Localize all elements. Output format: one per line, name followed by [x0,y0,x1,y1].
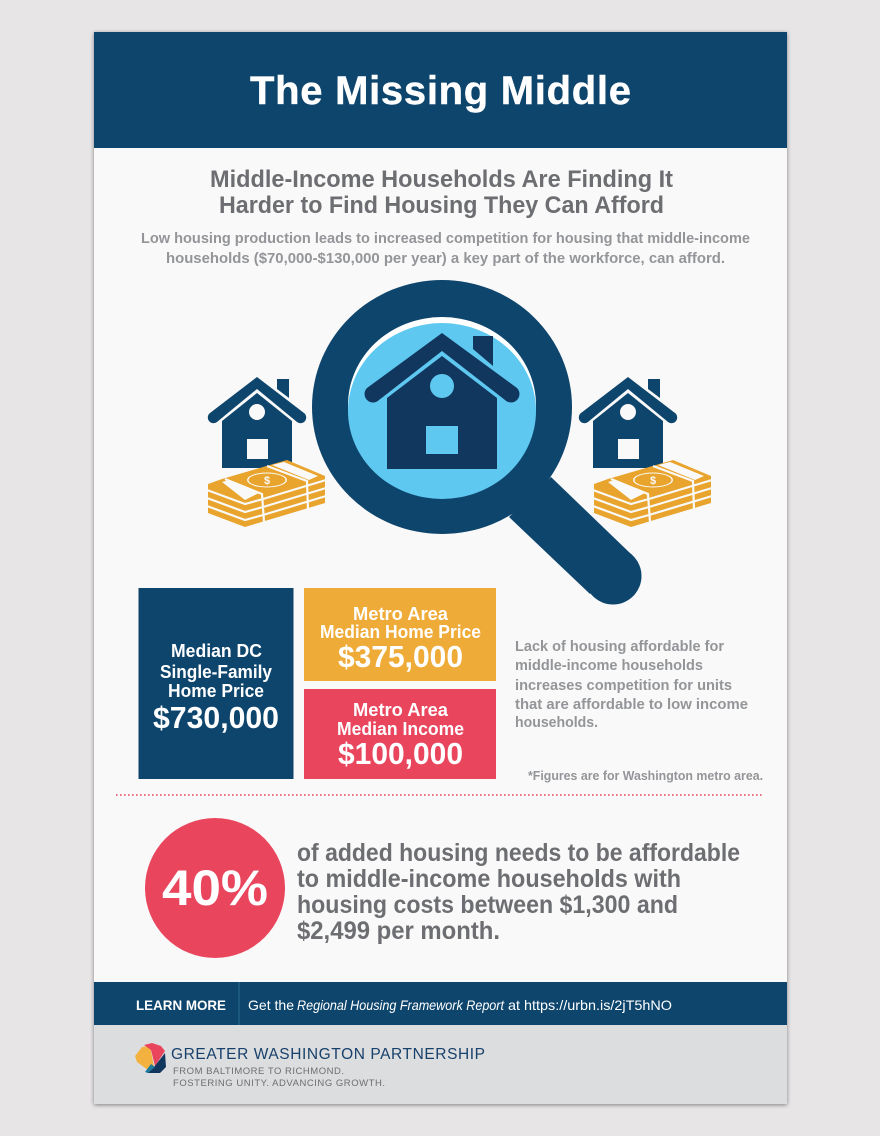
intro text: Low housing production leads to increased competition for housing that middle-income [141,230,750,247]
icon: left money stack [207,460,326,527]
panel: metro median income: $100,000 [338,736,463,771]
callout: 40 percent: 40% [162,860,268,916]
side text [515,638,748,731]
logo wordmark: FOSTERING UNITY. ADVANCING GROWTH. [173,1078,385,1089]
panel: median DC home price: Single-Family [160,662,272,682]
panel: metro median home price: $375,000 [338,639,463,674]
title banner [94,32,787,148]
side text: households. [515,714,598,731]
heading: Middle-Income Households Are Finding It [210,166,673,193]
logo wordmark: FROM BALTIMORE TO RICHMOND. [173,1066,344,1077]
icon: right house [579,377,677,468]
icon: partnership logo [135,1043,166,1073]
intro text: households ($70,000-$130,000 per year) a key part of the workforce, can afford. [166,250,725,267]
learn more bar: Regional Housing Framework Report [297,997,505,1013]
panel: metro median income: Metro Area [353,700,449,720]
footnote: *Figures are for Washington metro area. [528,769,763,783]
title: The Missing Middle [250,69,631,113]
panel: median DC home price: Home Price [168,681,264,701]
panel: metro median home price: Median Home Price [320,622,481,642]
learn more bar: Get the [248,997,294,1013]
side text: that are affordable to low income [515,696,748,713]
panel: metro median home price: Metro Area [353,604,449,624]
panel: median DC home price: $730,000 [153,700,279,735]
panel: metro median home price [304,588,496,681]
callout text [297,839,740,945]
icon: large house [365,333,519,469]
panel: metro median income [304,689,496,779]
callout text: housing costs between $1,300 and [297,891,678,919]
callout text: $2,499 per month. [297,917,500,945]
learn more bar [94,982,787,1025]
icon: left money stack: $ [264,475,270,487]
learn more bar: LEARN MORE [136,997,226,1013]
panel: median DC home price [138,588,294,779]
side text: middle-income households [515,657,703,674]
panel: metro median income: Median Income [337,719,464,739]
icon: right money stack: $ [650,475,656,487]
panel: median DC home price: Median DC [171,641,262,661]
logo wordmark [171,1046,485,1089]
learn more bar: at https://urbn.is/2jT5hNO [508,997,672,1013]
callout text: to middle-income households with [297,865,681,893]
intro text [141,230,750,267]
icon: magnifying glass with house [312,280,642,604]
poster card [94,32,787,1104]
icon: right money stack [593,460,712,527]
logo wordmark: GREATER WASHINGTON PARTNERSHIP [171,1046,485,1063]
footer band [94,1025,787,1104]
callout text: of added housing needs to be affordable [297,839,740,867]
heading: Harder to Find Housing They Can Afford [219,192,664,219]
heading [210,166,673,219]
callout: 40 percent [145,818,285,958]
side text: Lack of housing affordable for [515,638,724,655]
side text: increases competition for units [515,677,732,694]
icon: left house [208,377,306,468]
